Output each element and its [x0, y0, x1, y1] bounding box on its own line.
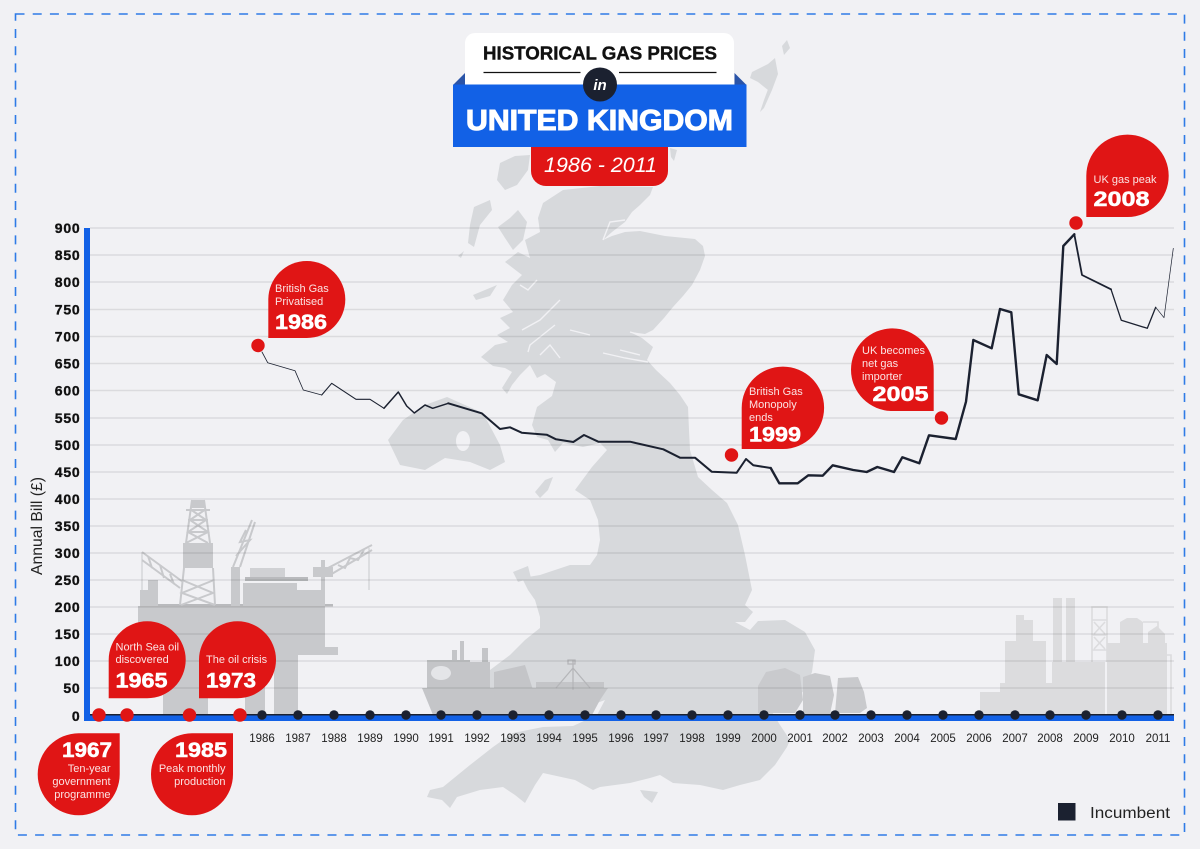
callout: British Gas Privatised 1986: Privatised — [275, 296, 323, 308]
y axis tick labels: 700 — [55, 328, 80, 344]
callout: North Sea oil discovered 1965: North Sea oil — [116, 642, 179, 654]
Shetland — [750, 40, 790, 112]
y axis tick labels: 100 — [55, 653, 80, 669]
callout: British Gas Privatised 1986 — [268, 261, 345, 338]
callout: UK gas peak 2008: 2008 — [1094, 188, 1150, 211]
callout: Peak monthly production 1985: 1985 — [175, 739, 227, 762]
y axis tick labels — [55, 220, 80, 724]
y axis tick labels: 600 — [55, 382, 80, 398]
callout: The oil crisis 1973: 1973 — [206, 670, 256, 692]
year markers on x axis — [257, 710, 1163, 720]
lochs and firths — [520, 220, 648, 362]
callout: British Gas Privatised 1986: British Gas — [275, 283, 329, 295]
Isle of Man, Anglesey, Isle of Wight, Orkney — [513, 148, 677, 803]
x axis year labels: 1993 — [500, 733, 526, 745]
y axis tick labels: 500 — [55, 437, 80, 453]
callout: UK becomes net gas importer 2005: net gas — [862, 358, 899, 370]
Scottish islands — [458, 155, 530, 300]
y axis tick labels: 150 — [55, 626, 80, 642]
y axis tick labels: 800 — [55, 274, 80, 290]
x axis year labels: 2008 — [1037, 733, 1063, 745]
x axis year labels: 2003 — [858, 733, 884, 745]
callout: UK gas peak 2008: UK gas peak — [1094, 174, 1157, 186]
title banner — [453, 33, 746, 186]
event marker dots on chart and axis — [92, 216, 1083, 722]
x axis year labels — [249, 733, 1170, 745]
illustration: vehicles on east coast — [758, 668, 867, 714]
callout: UK gas peak 2008 — [1086, 135, 1169, 217]
callout: British Gas Privatised 1986: 1986 — [275, 311, 327, 334]
grid lines — [90, 228, 1174, 688]
callout: The oil crisis 1973: The oil crisis — [206, 654, 268, 666]
legend: incumbent — [1058, 803, 1171, 822]
y axis tick labels: 850 — [55, 247, 80, 263]
callout: Peak monthly production 1985: Peak monthly — [159, 763, 226, 775]
callout: North Sea oil discovered 1965: discovered — [116, 654, 169, 666]
x axis year labels: 2006 — [966, 733, 992, 745]
Northern Ireland — [388, 397, 505, 470]
x axis year labels: 2010 — [1109, 733, 1135, 745]
x axis year labels: 1999 — [715, 733, 741, 745]
y axis tick labels: 250 — [55, 572, 80, 588]
callout: Ten-year government programme 1967 — [38, 733, 120, 815]
x axis year labels: 2009 — [1073, 733, 1099, 745]
y axis tick labels: 50 — [63, 680, 80, 696]
x axis year labels: 1995 — [572, 733, 598, 745]
y axis tick labels: 550 — [55, 410, 80, 426]
callout: Peak monthly production 1985: production — [174, 776, 226, 788]
y axis tick labels: 0 — [72, 708, 80, 724]
x axis year labels: 1991 — [428, 733, 454, 745]
x axis year labels: 1987 — [285, 733, 311, 745]
x axis year labels: 2011 — [1146, 733, 1170, 745]
x axis year labels: 1988 — [321, 733, 347, 745]
x axis year labels: 2007 — [1002, 733, 1028, 745]
callout: Ten-year government programme 1967: Ten-year — [68, 763, 111, 775]
title banner: in — [593, 77, 607, 94]
callout: UK becomes net gas importer 2005: importer — [862, 371, 903, 383]
heading: united kingdom: UNITED KINGDOM — [466, 105, 733, 137]
callout: British Gas Monopoly ends 1999: 1999 — [749, 424, 801, 446]
callout: UK becomes net gas importer 2005: 2005 — [872, 383, 929, 406]
y axis tick labels: 450 — [55, 464, 80, 480]
callout: British Gas Monopoly ends 1999: Monopoly — [749, 399, 797, 411]
x axis year labels: 1990 — [393, 733, 419, 745]
y axis and x axis — [84, 228, 1174, 721]
callout: Ten-year government programme 1967: government — [52, 776, 110, 788]
y axis tick labels: 750 — [55, 302, 80, 318]
map of the United Kingdom — [388, 40, 815, 808]
x axis year labels: 1986 — [249, 733, 275, 745]
illustration: tanker ship — [422, 641, 608, 715]
callout: British Gas Monopoly ends 1999: ends — [749, 412, 773, 424]
y axis tick labels: 900 — [55, 220, 80, 236]
x axis year labels: 1994 — [536, 733, 562, 745]
illustration: offshore oil rig — [138, 500, 372, 715]
date range: 1986 - 2011 — [544, 154, 657, 177]
heading: historical gas prices: HISTORICAL GAS PRICES — [483, 42, 717, 64]
legend: incumbent: Incumbent — [1090, 805, 1171, 822]
x axis year labels: 1996 — [608, 733, 634, 745]
x axis year labels: 2001 — [787, 733, 813, 745]
x axis year labels: 1992 — [464, 733, 490, 745]
callout: Ten-year government programme 1967: 1967 — [62, 739, 112, 762]
y axis tick labels: 200 — [55, 599, 80, 615]
illustration: gas refinery — [980, 598, 1171, 715]
x axis year labels: 2000 — [751, 733, 777, 745]
y axis tick labels: 350 — [55, 518, 80, 534]
x axis year labels: 1989 — [357, 733, 383, 745]
callout: North Sea oil discovered 1965: 1965 — [116, 670, 168, 692]
callout: Peak monthly production 1985 — [151, 733, 233, 815]
x axis year labels: 2005 — [930, 733, 956, 745]
x axis year labels: 1997 — [643, 733, 669, 745]
callout: Ten-year government programme 1967: programme — [54, 789, 110, 801]
callout: British Gas Monopoly ends 1999 — [742, 367, 824, 449]
y axis title: Annual Bill (£) — [29, 477, 46, 575]
y axis tick labels: 650 — [55, 356, 80, 372]
y axis tick labels: 300 — [55, 545, 80, 561]
callout: The oil crisis 1973 — [199, 621, 276, 698]
callout: UK becomes net gas importer 2005: UK becomes — [862, 345, 925, 357]
x axis year labels: 2002 — [822, 733, 848, 745]
y axis tick labels: 400 — [55, 491, 80, 507]
callout: British Gas Monopoly ends 1999: British Gas — [749, 386, 803, 398]
line chart: annual gas bill — [262, 234, 1173, 483]
callout: UK becomes net gas importer 2005 — [851, 328, 934, 411]
callout: North Sea oil discovered 1965 — [109, 621, 186, 698]
x axis year labels: 2004 — [894, 733, 920, 745]
x axis year labels: 1998 — [679, 733, 705, 745]
